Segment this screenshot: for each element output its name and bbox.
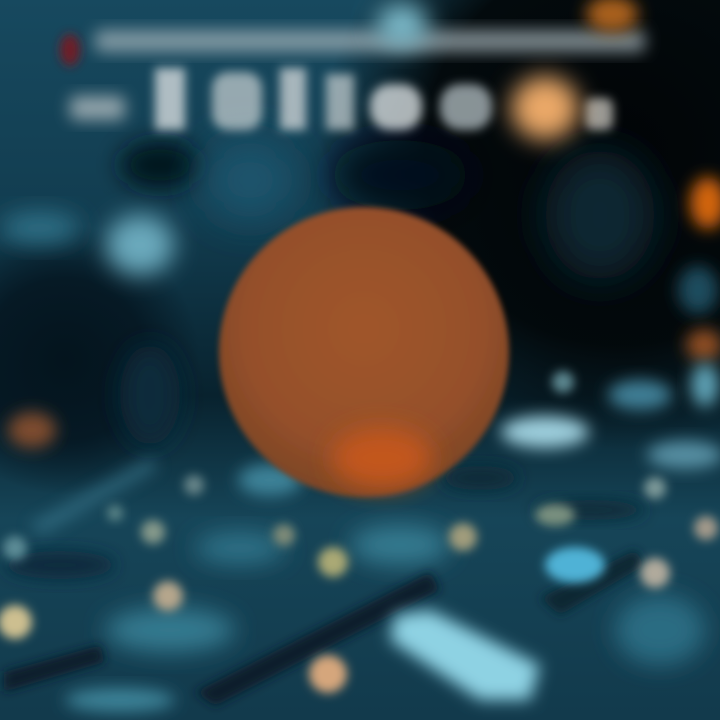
glow: orange behind title (511, 76, 579, 140)
tile: bright cyan lower (390, 610, 540, 700)
glow: top light (376, 3, 428, 47)
coin (219, 207, 509, 497)
glow: top orange (586, 0, 638, 32)
glowing dots (0, 371, 718, 693)
tile: bright blue (545, 547, 605, 583)
glow: right lower orange (686, 329, 720, 361)
dark diagonal bar (195, 572, 440, 706)
title accent: red mark (60, 34, 80, 66)
title: blurred illegible heading (70, 30, 645, 130)
dark right bar (540, 550, 645, 615)
dark machinery shapes (0, 140, 718, 445)
glow: left orange (8, 412, 56, 448)
circuit board tiles (4, 363, 720, 712)
dark left bar (4, 645, 105, 692)
glow: right orange (690, 177, 720, 229)
coin highlight (332, 428, 432, 488)
